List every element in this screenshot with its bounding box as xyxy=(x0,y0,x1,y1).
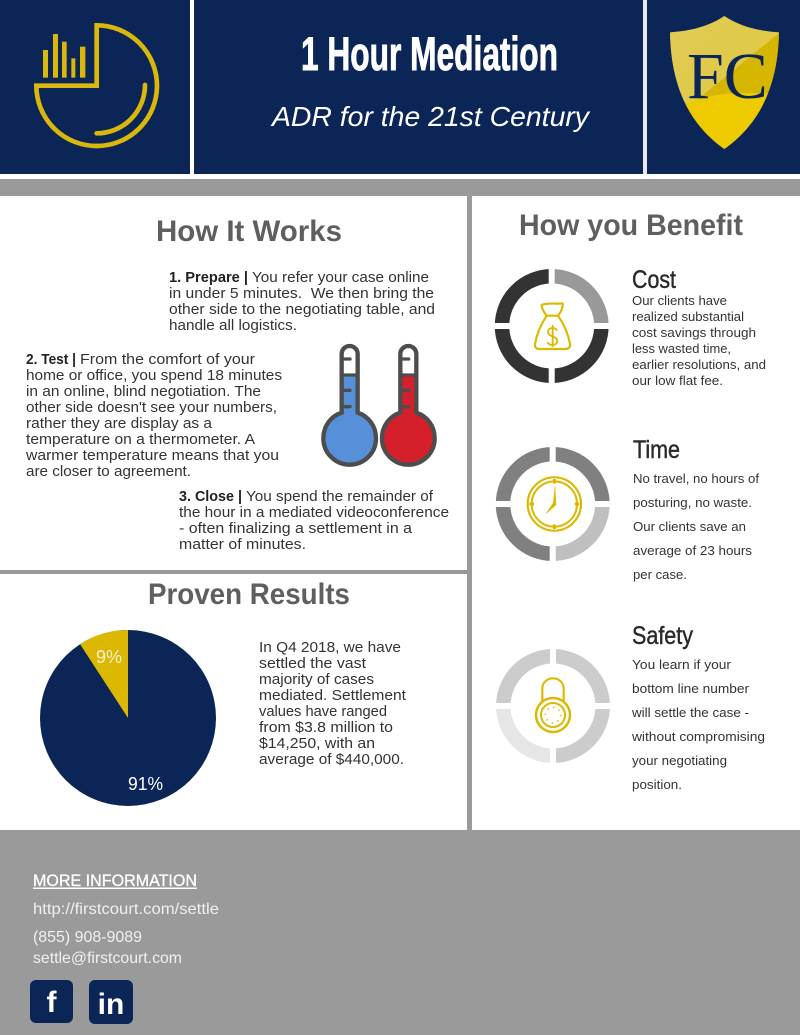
icon: FC shield logo: FC xyxy=(687,40,768,113)
text: step 1 prepare: other side to the negotiating table, and xyxy=(169,302,435,318)
text: step 2 test: warmer temperature means that you xyxy=(25,448,279,464)
text: step 2 test: 2. Test | xyxy=(26,352,76,368)
text: results summary: In Q4 2018, we have xyxy=(259,640,401,656)
text: step 3 close: matter of minutes. xyxy=(179,537,306,553)
text: cost: realized substantial xyxy=(632,309,744,324)
text: cost: earlier resolutions, and xyxy=(632,357,766,372)
text: step 2 test: in an online, blind negotiation. The xyxy=(26,384,261,400)
text: time: No travel, no hours of xyxy=(633,471,759,486)
icon: FC shield logo xyxy=(667,13,780,153)
text: time: posturing, no waste. xyxy=(633,495,752,510)
text: time: per case. xyxy=(633,567,687,582)
icon: linkedin: in xyxy=(98,988,124,1021)
text: step 1 prepare: in under 5 minutes. We then bring the xyxy=(169,286,434,302)
text: step 1 prepare: 1. Prepare | xyxy=(169,270,248,286)
panel: header xyxy=(0,0,800,174)
text: step 3 close xyxy=(179,489,449,553)
chart: pie xyxy=(40,630,216,806)
text: step 1 prepare: handle all logistics. xyxy=(169,318,297,334)
text: step 3 close: - often finalizing a settlement in a xyxy=(179,521,413,537)
text: website: http://firstcourt.com/settle xyxy=(33,901,219,918)
text: results summary: settled the vast xyxy=(259,656,366,672)
text: cost: cost savings through xyxy=(632,325,756,340)
panel: how you benefit xyxy=(491,209,766,792)
heading: how you benefit: How you Benefit xyxy=(519,209,743,242)
text: safety: bottom line number xyxy=(632,681,750,696)
icon: linkedin xyxy=(89,980,133,1024)
text: step 3 close: 3. Close | xyxy=(179,489,242,505)
text: step 1 prepare xyxy=(169,270,435,334)
heading: proven results: Proven Results xyxy=(148,578,350,611)
text: step 1 prepare: You refer your case online xyxy=(252,270,429,286)
text: time: average of 23 hours xyxy=(633,543,753,558)
text: safety: You learn if your xyxy=(632,657,732,672)
heading: how it works: How It Works xyxy=(156,215,342,248)
text: cost: Our clients have xyxy=(632,293,727,308)
text: results summary: values have ranged xyxy=(259,704,387,720)
panel: proven results xyxy=(40,578,406,806)
text: results summary: majority of cases xyxy=(259,672,374,688)
text: safety xyxy=(631,622,765,792)
gray band xyxy=(0,179,800,196)
divider: vertical xyxy=(467,196,472,830)
text: cost xyxy=(632,266,766,388)
icon: safety ring with lock xyxy=(492,645,614,767)
text: step 2 test: temperature on a thermometer. A xyxy=(26,432,255,448)
icon: cost ring with money bag xyxy=(491,265,612,386)
text: step 2 test: are closer to agreement. xyxy=(26,464,191,480)
text: results summary: mediated. Settlement xyxy=(259,688,406,704)
text: safety: will settle the case - xyxy=(631,705,749,720)
text: results summary: from $3.8 million to xyxy=(259,720,393,736)
text: time xyxy=(633,436,759,582)
text: cost: Cost xyxy=(632,266,676,294)
text: results summary: average of $440,000. xyxy=(259,752,404,768)
subtitle: ADR for the 21st Century xyxy=(270,101,591,132)
text: safety: without compromising xyxy=(631,729,765,744)
chart: pie: 9% xyxy=(96,647,122,667)
text: step 2 test xyxy=(25,352,282,480)
icon: thermometers xyxy=(323,346,435,465)
text: step 3 close: the hour in a mediated videoconference xyxy=(179,505,449,521)
chart: pie: 91% xyxy=(128,774,163,794)
text: step 2 test: other side doesn't see your numbers, xyxy=(26,400,277,416)
text: results summary xyxy=(259,640,406,768)
text: time: Time xyxy=(633,436,680,464)
text: step 2 test: From the comfort of your xyxy=(80,352,255,368)
panel: how it works xyxy=(25,215,449,553)
icon: facebook: f xyxy=(46,986,58,1019)
text: time: Our clients save an xyxy=(633,519,746,534)
text: email: settle@firstcourt.com xyxy=(33,950,182,967)
divider: horizontal xyxy=(0,570,467,574)
text: step 2 test: rather they are display as a xyxy=(26,416,213,432)
text: phone: (855) 908-9089 xyxy=(33,929,142,946)
text: results summary: $14,250, with an xyxy=(259,736,375,752)
icon: time ring with clock xyxy=(492,443,613,565)
panel: footer xyxy=(0,830,800,1035)
text: step 2 test: home or office, you spend 18 minutes xyxy=(26,368,282,384)
text: cost: our low flat fee. xyxy=(632,373,723,388)
icon: pie and bars logo xyxy=(36,25,157,146)
text: cost: less wasted time, xyxy=(632,341,731,356)
title: 1 Hour Mediation xyxy=(301,27,558,80)
heading: more information: MORE INFORMATION xyxy=(33,871,197,890)
text: safety: your negotiating xyxy=(632,753,727,768)
icon: facebook xyxy=(30,980,73,1023)
text: step 3 close: You spend the remainder of xyxy=(246,489,434,505)
text: safety: position. xyxy=(632,777,682,792)
text: safety: Safety xyxy=(632,622,693,650)
